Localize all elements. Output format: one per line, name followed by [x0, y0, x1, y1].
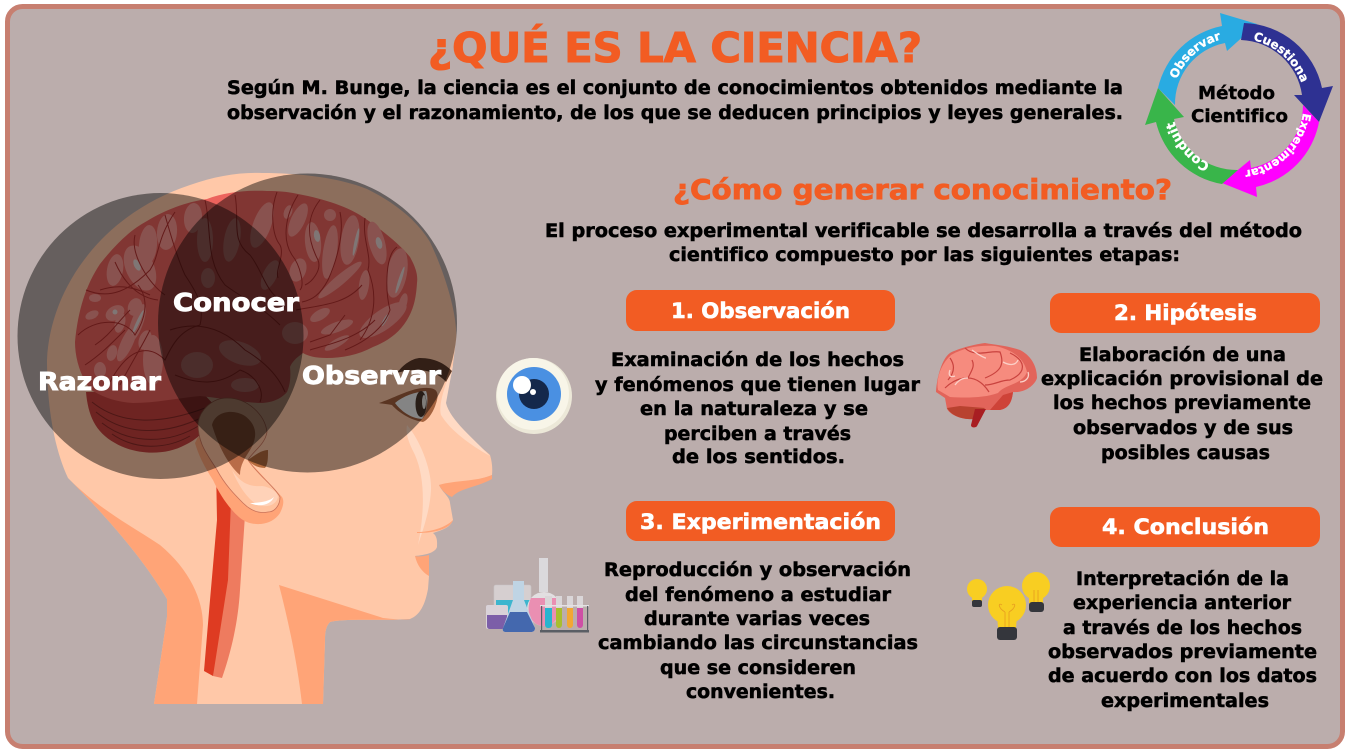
- text: experimentación: [598, 560, 918, 703]
- ear: [195, 398, 283, 524]
- text: conclusión: experiencia anterior: [1073, 593, 1292, 614]
- text: conclusión: [1048, 569, 1317, 712]
- brain lobes: [84, 199, 412, 392]
- icon: brain: [936, 343, 1037, 427]
- text: hipótesis: Elaboración de una: [1079, 345, 1286, 366]
- head shadow: under chin: [279, 585, 410, 704]
- bulb: small left: [967, 579, 987, 607]
- icon: light bulbs: [967, 572, 1050, 640]
- arrow: Conduit: [1145, 88, 1238, 184]
- brain folds: [78, 192, 397, 402]
- arrow: Experimentar: [1222, 105, 1319, 197]
- icon: lab flasks: [486, 558, 589, 632]
- text: observación: perciben a través: [664, 424, 851, 445]
- pill: 3. Experimentación: [626, 501, 895, 541]
- text: hipótesis: explicación provisional de: [1041, 369, 1323, 390]
- process intro text: El proceso experimental verificable se desarrolla a través del método: [545, 221, 1302, 242]
- text: observación: en la naturaleza y se: [640, 399, 868, 420]
- text: experimentación: cambiando las circunstancias: [598, 633, 918, 654]
- text: experimentación: que se consideren: [660, 658, 856, 679]
- text: observación: de los sentidos.: [672, 447, 845, 468]
- text: experimentación: durante varias veces: [644, 609, 870, 630]
- label: Conocer: Conocer: [173, 288, 300, 317]
- bulb: large centre: [988, 586, 1026, 640]
- label: Conduit: Conduit: [1166, 122, 1208, 170]
- text: conclusión: Interpretación de la: [1076, 569, 1289, 590]
- center label: Cientifico: [1191, 107, 1288, 127]
- text: experimentación: Reproducción y observación: [604, 560, 911, 581]
- text: experimentación: del fenómeno a estudiar: [625, 585, 892, 606]
- text: observación: Examinación de los hechos: [611, 350, 904, 371]
- process intro text: cientifico compuesto por las siguientes etapas:: [669, 245, 1180, 266]
- icon: eye: [496, 358, 572, 434]
- text: experimentación: convenientes.: [686, 682, 835, 703]
- process intro text: [545, 221, 1302, 266]
- arrow: Observar: [1158, 13, 1257, 105]
- bulb: right: [1022, 572, 1050, 612]
- head shadow: nose and lips: [415, 475, 492, 576]
- arrow: Cuestiona: [1241, 23, 1333, 122]
- pill: 2. Hipótesis: 2. Hipótesis: [1114, 301, 1257, 326]
- illustration: head with brain and Venn circles: [18, 173, 492, 704]
- head highlight: nose bridge and cheek: [407, 365, 490, 545]
- title: ¿QUÉ ES LA CIENCIA?: [428, 24, 922, 72]
- brain: [75, 191, 417, 453]
- text: observación: [595, 350, 921, 468]
- label: Razonar: Razonar: [38, 367, 162, 396]
- intro text: observación y el razonamiento, de los que se deducen principios y leyes generales.: [227, 103, 1123, 124]
- pill: 1. Observación: 1. Observación: [671, 299, 850, 324]
- label: Cuestiona: Cuestiona: [1254, 32, 1307, 82]
- text: hipótesis: posibles causas: [1101, 443, 1270, 464]
- text: conclusión: experimentales: [1101, 691, 1269, 712]
- Venn circle: Observar: [158, 174, 457, 472]
- test tubes and rack: [540, 596, 589, 632]
- eye in profile: [379, 388, 438, 422]
- subheading: ¿Cómo generar conocimiento?: [673, 173, 1172, 206]
- text: hipótesis: observados y de sus: [1073, 418, 1293, 439]
- text: hipótesis: [1041, 345, 1323, 464]
- label: Experimentar: Experimentar: [1245, 114, 1312, 177]
- text: observación: y fenómenos que tienen lugar: [595, 375, 921, 396]
- pill: 3. Experimentación: 3. Experimentación: [640, 510, 881, 535]
- head silhouette: [47, 173, 492, 704]
- round flask: pink: [539, 558, 548, 592]
- text: hipótesis: los hechos previamente: [1053, 393, 1311, 414]
- text: conclusión: a través de los hechos: [1063, 618, 1302, 639]
- beaker: cyan: [494, 585, 531, 627]
- scientific method cycle: [1145, 13, 1333, 197]
- intro text: Según M. Bunge, la ciencia es el conjunto de conocimientos obtenidos mediante la: [227, 78, 1123, 99]
- intro text: [227, 78, 1123, 124]
- brain highlights: [112, 228, 406, 334]
- center label: Método: [1198, 84, 1275, 104]
- head shadow: back of neck: [68, 478, 203, 704]
- text: conclusión: observados previamente: [1048, 642, 1317, 663]
- pill: 4. Conclusión: [1050, 507, 1320, 547]
- center label: [1191, 84, 1288, 127]
- conical flask: blue: [503, 581, 535, 632]
- label: Observar: Observar: [302, 361, 442, 390]
- label: Observar: Observar: [1170, 32, 1220, 78]
- pill: 1. Observación: [626, 290, 895, 331]
- pill: 4. Conclusión: 4. Conclusión: [1102, 515, 1269, 540]
- beaker: purple: [486, 605, 508, 629]
- artery: [204, 466, 245, 678]
- pill: 2. Hipótesis: [1050, 293, 1320, 333]
- Venn circle: Razonar: [18, 193, 304, 479]
- text: conclusión: de acuerdo con los datos: [1048, 666, 1317, 687]
- eyebrow: [397, 358, 452, 382]
